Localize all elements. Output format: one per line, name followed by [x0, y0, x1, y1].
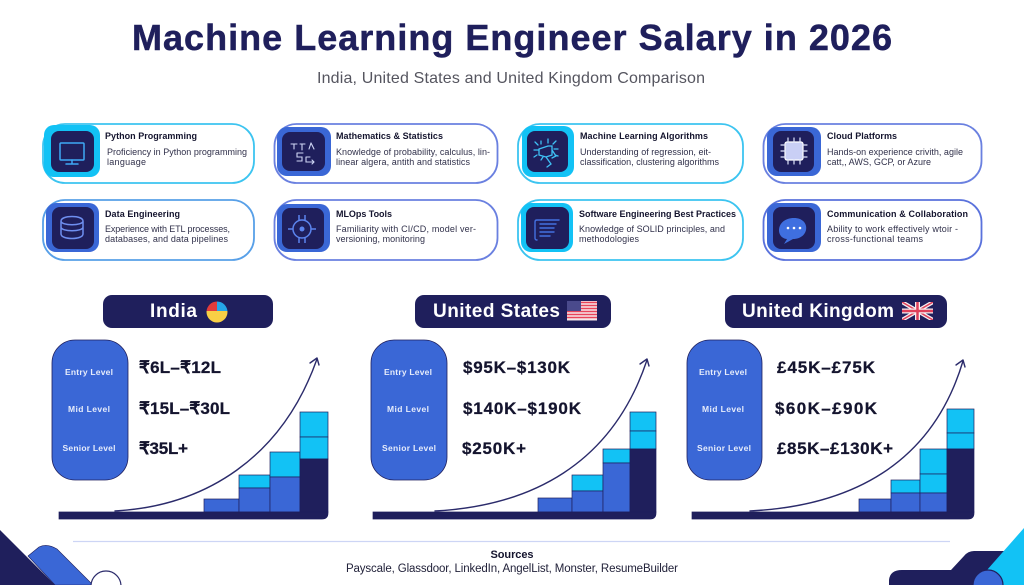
country heading: United Kingdom [725, 295, 947, 328]
level labels: Entry Level [699, 367, 747, 377]
level labels: Entry Level [384, 367, 432, 377]
description [105, 224, 230, 244]
subtitle: India, United States and United Kingdom Comparison [317, 70, 705, 87]
level labels [371, 340, 447, 480]
panel: Software Engineering Best Practices [518, 200, 743, 260]
panel: Cloud Platforms [764, 124, 982, 183]
description: Experience with ETL processes, [105, 224, 230, 234]
level labels: Mid Level [387, 404, 429, 414]
sources: Payscale, Glassdoor, LinkedIn, AngelList, Monster, ResumeBuilder [346, 563, 678, 575]
panel: India [52, 295, 328, 519]
description: Understanding of regression, eit- [580, 147, 711, 157]
salary values [775, 358, 893, 458]
heading: Data Engineering [105, 209, 180, 219]
salary values: $60K–£90K [775, 399, 878, 418]
description: cross-functional teams [827, 234, 924, 244]
salary values: $250K+ [462, 439, 526, 458]
level labels [52, 340, 128, 480]
panel: United Kingdom [687, 295, 974, 519]
salary values: ₹35L+ [139, 439, 188, 458]
icon: US flag [567, 301, 597, 320]
country heading: United Kingdom: United Kingdom [742, 301, 894, 322]
level labels: Senior Level [697, 443, 751, 453]
description: Familiarity with CI/CD, model ver- [336, 224, 476, 234]
country heading: United States [415, 295, 611, 328]
heading: Python Programming [105, 131, 197, 141]
level labels: Entry Level [65, 367, 113, 377]
bar chart [59, 412, 328, 519]
footer divider [73, 540, 950, 542]
description [827, 224, 958, 244]
icon: neural network [522, 126, 574, 177]
heading: Mathematics & Statistics [336, 131, 443, 141]
country heading: India [103, 295, 273, 328]
heading: MLOps Tools [336, 209, 392, 219]
description: versioning, monitoring [336, 234, 425, 244]
description [336, 147, 490, 167]
description [580, 147, 720, 167]
heading: Machine Learning Algorithms [580, 131, 708, 141]
description: catt,, AWS, GCP, or Azure [827, 157, 931, 167]
icon: India flag circle [206, 301, 228, 323]
description [579, 224, 725, 244]
decoration: bottom right shapes [889, 528, 1024, 585]
salary values: £85K–£130K+ [777, 439, 893, 458]
description: Hands-on experience crivith, agile [827, 147, 963, 157]
bar chart [373, 412, 656, 519]
description: classification, clustering algorithms [580, 157, 720, 167]
arrow: growth [750, 360, 965, 511]
heading: Software Engineering Best Practices [579, 209, 736, 219]
description: methodologies [579, 234, 640, 244]
description: language [107, 157, 146, 167]
heading: Communication & Collaboration [827, 209, 968, 219]
sources [346, 549, 678, 575]
description: Knowledge of probability, calculus, lin- [336, 147, 490, 157]
panel: Python Programming [43, 124, 254, 183]
description: Knowledge of SOLID principles, and [579, 224, 725, 234]
heading: Cloud Platforms [827, 131, 897, 141]
description: databases, and data pipelines [105, 234, 228, 244]
level labels: Senior Level [382, 443, 436, 453]
icon: database [46, 203, 99, 252]
panel: Communication & Collaboration [764, 200, 982, 260]
salary values: $140K–$190K [463, 399, 582, 418]
salary values: ₹6L–₹12L [139, 358, 221, 377]
panel: United States [371, 295, 656, 519]
title: Machine Learning Engineer Salary in 2026 [132, 17, 892, 58]
level labels: Senior Level [62, 443, 116, 453]
description [336, 224, 476, 244]
description [107, 147, 247, 167]
salary values [139, 358, 230, 458]
icon: monitor [44, 125, 100, 177]
salary values [462, 358, 582, 458]
description: Proficiency in Python programming [107, 147, 247, 157]
icon: document [521, 203, 573, 252]
panel: Data Engineering [43, 200, 254, 260]
level labels [687, 340, 762, 480]
country heading: India: India [150, 301, 197, 322]
arrow: growth [435, 359, 649, 511]
description [827, 147, 963, 167]
description: linear algera, antith and statistics [336, 157, 470, 167]
salary values: £45K–£75K [777, 358, 876, 377]
level labels: Mid Level [68, 404, 110, 414]
icon: chip [767, 127, 821, 176]
panel: MLOps Tools [274, 200, 498, 260]
level labels: Mid Level [702, 404, 744, 414]
sources: Sources [490, 549, 534, 561]
salary values: ₹15L–₹30L [139, 399, 230, 418]
panel: Mathematics & Statistics [274, 124, 498, 183]
panel: Machine Learning Algorithms [518, 124, 743, 183]
country heading: United States: United States [433, 301, 560, 322]
icon: chat bubble [767, 203, 821, 252]
salary values: $95K–$130K [463, 358, 571, 377]
icon: math symbols [277, 127, 331, 176]
arrow: growth [115, 358, 319, 511]
decoration: bottom left shapes [0, 530, 121, 585]
icon: gear circuit [277, 204, 330, 252]
description: Ability to work effectively wtoir - [827, 224, 958, 234]
bar chart [692, 409, 974, 519]
icon: UK flag [902, 302, 933, 320]
